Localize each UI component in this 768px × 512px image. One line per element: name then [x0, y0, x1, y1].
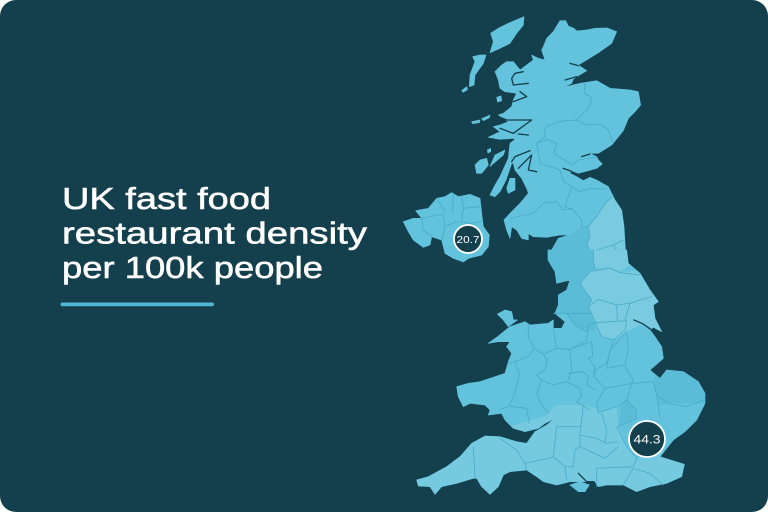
shaded regions: [417, 250, 684, 494]
Northumberland and Durham lighter regions: [587, 197, 626, 260]
Scotland and northern England: [462, 17, 641, 260]
Cumbria: [543, 250, 595, 287]
England and Wales outline: [417, 250, 705, 494]
Scottish sea lochs: [498, 63, 590, 172]
title: UK fast food: [62, 181, 271, 216]
Hertfordshire: [618, 400, 637, 427]
regional borders: [473, 250, 703, 487]
badge: Northern Ireland value 20.7: [454, 225, 482, 253]
Durham and Tyne: [593, 250, 630, 272]
Scottish islands: [462, 17, 524, 193]
badge: London value 44.3: [629, 421, 665, 457]
title underline: [60, 302, 214, 306]
map: United Kingdom regions: [403, 17, 710, 503]
Yorkshire: [580, 268, 667, 340]
Anglesey and Isle of Wight: [497, 310, 589, 492]
Scottish region borders: [510, 83, 623, 260]
Scotland outline: [488, 21, 641, 260]
title: [62, 181, 368, 285]
title: restaurant density: [62, 216, 368, 250]
Humber and Poole inlets: [578, 320, 651, 482]
England and Wales: [410, 250, 710, 503]
Lancashire: [550, 280, 592, 313]
Cumbria darker region: [548, 227, 594, 260]
Northern Ireland: [403, 193, 489, 262]
title: per 100k people: [62, 250, 323, 285]
badge: Northern Ireland value 20.7: 20.7: [456, 234, 480, 246]
South West and South East: [417, 405, 684, 494]
East Anglia: [653, 370, 710, 407]
Greater Manchester: [590, 330, 591, 331]
badge: London value 44.3: 44.3: [634, 432, 661, 446]
